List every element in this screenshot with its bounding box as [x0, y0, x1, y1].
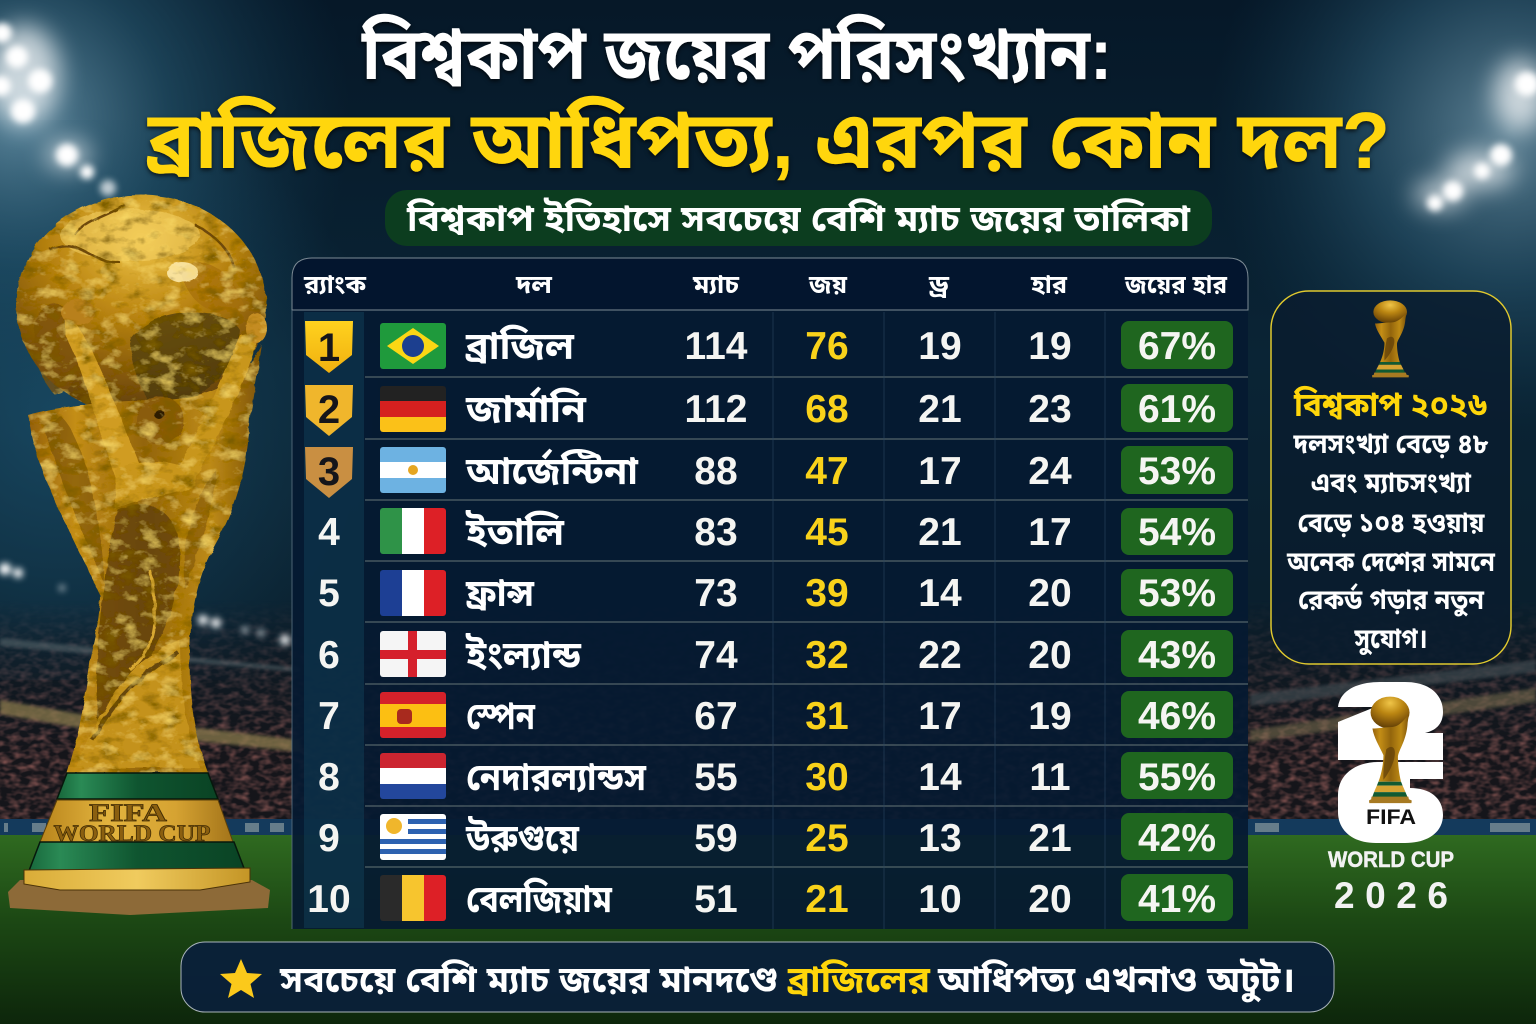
flag: Italy: [380, 508, 446, 554]
row 4 Italy: 45: [805, 511, 849, 554]
row 8 Netherlands: 14: [918, 756, 962, 799]
row 9 Uruguay: 59: [694, 817, 738, 860]
flag: Netherlands: [380, 753, 446, 799]
row 5 France: 73: [694, 572, 738, 615]
row 7 Spain: 67: [694, 695, 738, 738]
row 8 Netherlands: 11: [1029, 756, 1071, 799]
row 6 England: 22: [918, 634, 962, 677]
row 4 Italy: [318, 508, 1233, 555]
FIFA World Cup 2026 logo: 2026: [1334, 875, 1448, 916]
row 9 Uruguay: 25: [805, 817, 849, 860]
rank badge 1: [305, 321, 353, 373]
icon: star: [220, 959, 262, 998]
bottom callout: [181, 942, 1334, 1012]
row 9 Uruguay: 9: [318, 817, 340, 860]
row 8 Netherlands: নেদারল্যান্ডস: [466, 757, 646, 799]
row 7 Spain: 46%: [1138, 695, 1216, 738]
row 9 Uruguay: 42%: [1138, 817, 1216, 860]
table header: জয়: [808, 271, 848, 299]
row 7 Spain: 17: [918, 695, 962, 738]
row 8 Netherlands: [318, 752, 1233, 799]
row 7 Spain: 19: [1028, 695, 1072, 738]
FIFA World Cup 2026 logo: WORLD CUP: [1328, 847, 1454, 872]
row 4 Italy: 83: [694, 511, 738, 554]
side panel: World Cup 2026: বিশ্বকাপ ২০২৬: [1293, 386, 1487, 423]
row 5 France: 39: [805, 572, 849, 615]
bottom callout: সবচেয়ে বেশি ম্যাচ জয়ের মানদণ্ডে: [279, 959, 778, 1000]
flag: Spain: [380, 692, 446, 738]
row 10 Belgium: 21: [805, 878, 849, 921]
icon: logo trophy: [1369, 697, 1412, 803]
row 8 Netherlands: 30: [805, 756, 849, 799]
row 2 Germany: 68: [805, 388, 849, 431]
row 4 Italy: ইতালি: [465, 510, 565, 554]
table header: ম্যাচ: [692, 271, 740, 299]
row 4 Italy: 21: [918, 511, 962, 554]
row 3 Argentina: 24: [1028, 450, 1072, 493]
row 1 Brazil: ব্রাজিল: [465, 324, 575, 368]
table panel: [292, 258, 1248, 929]
table header: [292, 258, 1248, 310]
row 1 Brazil: 19: [918, 325, 962, 368]
row 10 Belgium: 51: [694, 878, 738, 921]
World Cup trophy: [8, 195, 270, 915]
table header: ড্র: [928, 271, 950, 299]
row 3 Argentina: [380, 446, 1233, 494]
row 3 Argentina: 53%: [1138, 450, 1216, 493]
row 5 France: ফ্রান্স: [465, 573, 535, 615]
title: [146, 13, 1390, 185]
row 9 Uruguay: 13: [918, 817, 962, 860]
row 3 Argentina: 47: [805, 450, 849, 493]
rank badge 3: 3: [318, 450, 340, 494]
flag: Argentina: [380, 447, 446, 493]
row 2 Germany: 61%: [1138, 388, 1216, 431]
subtitle pill: বিশ্বকাপ ইতিহাসে সবচেয়ে বেশি ম্যাচ জয়ের তালিকা: [406, 198, 1191, 239]
row 1 Brazil: 67%: [1138, 325, 1216, 368]
row 10 Belgium: 10: [918, 878, 962, 921]
flag: Uruguay: [380, 814, 446, 860]
row 2 Germany: 23: [1028, 388, 1072, 431]
side panel: World Cup 2026: রেকর্ড গড়ার নতুন: [1298, 582, 1485, 617]
row 2 Germany: 21: [918, 388, 962, 431]
row 5 France: 53%: [1138, 572, 1216, 615]
row 1 Brazil: 114: [685, 325, 748, 368]
row 3 Argentina: আর্জেন্টিনা: [465, 449, 639, 493]
figure: [136, 396, 184, 444]
row 5 France: 5: [318, 572, 340, 615]
bottom callout: ব্রাজিলের: [787, 959, 931, 1000]
trophy base engraving: [54, 800, 210, 846]
side panel: World Cup 2026: এবং ম্যাচসংখ্যা: [1311, 467, 1472, 498]
trophy base engraving: FIFA: [89, 800, 167, 827]
row 6 England: ইংল্যান্ড: [465, 633, 582, 677]
row 2 Germany: 112: [685, 388, 747, 431]
row 9 Uruguay: উরুগুয়ে: [465, 816, 580, 860]
row 2 Germany: [380, 384, 1233, 432]
row 4 Italy: 54%: [1138, 511, 1216, 554]
row 1 Brazil: [380, 321, 1233, 369]
row 6 England: 6: [318, 634, 340, 677]
row 8 Netherlands: 55: [694, 756, 738, 799]
row 1 Brazil: 76: [805, 325, 849, 368]
row 5 France: [318, 569, 1233, 616]
row 7 Spain: স্পেন: [466, 696, 536, 738]
row 7 Spain: 31: [805, 695, 849, 738]
table header: র‍্যাংক: [303, 271, 367, 299]
table header: হার: [1030, 271, 1068, 299]
FIFA World Cup 2026 logo: [1328, 682, 1454, 916]
arms: [65, 310, 142, 490]
rank badge 2: [305, 385, 353, 436]
row 6 England: 20: [1028, 634, 1072, 677]
bottom callout: আধিপত্য এখনাও অটুট।: [937, 959, 1295, 1003]
row 5 France: 14: [918, 572, 962, 615]
FIFA World Cup 2026 logo: FIFA: [1366, 806, 1416, 829]
side panel: World Cup 2026: অনেক দেশের সামনে: [1286, 546, 1495, 577]
flag: Germany: [380, 386, 446, 432]
table header: জয়ের হার: [1124, 271, 1228, 299]
row 1 Brazil: 19: [1028, 325, 1072, 368]
row 5 France: 20: [1028, 572, 1072, 615]
row 6 England: [318, 630, 1233, 677]
subtitle pill: [385, 190, 1212, 246]
rank badge 2: 2: [318, 388, 340, 432]
row 3 Argentina: 17: [918, 450, 962, 493]
side panel: World Cup 2026: বেড়ে ১০৪ হওয়ায়: [1298, 507, 1485, 538]
row 2 Germany: জার্মানি: [465, 387, 587, 431]
side panel: World Cup 2026: দলসংখ্যা বেড়ে ৪৮: [1293, 428, 1488, 459]
row 9 Uruguay: 21: [1028, 817, 1072, 860]
row 10 Belgium: 20: [1028, 878, 1072, 921]
side panel: World Cup 2026: [1271, 291, 1511, 664]
row 7 Spain: [318, 691, 1233, 738]
table header: দল: [515, 271, 553, 299]
flag: Belgium: [380, 875, 446, 921]
title: ব্রাজিলের আধিপত্য, এরপর কোন দল?: [146, 94, 1390, 185]
trophy base engraving: WORLD CUP: [54, 821, 210, 846]
row 6 England: 74: [694, 634, 738, 677]
row 10 Belgium: বেলজিয়াম: [466, 877, 613, 921]
row 4 Italy: 4: [318, 511, 340, 554]
row 4 Italy: 17: [1028, 511, 1072, 554]
flag: England: [380, 631, 446, 677]
side panel: World Cup 2026: সুযোগ।: [1354, 623, 1428, 656]
rank badge 1: 1: [318, 326, 340, 370]
row 8 Netherlands: 55%: [1138, 756, 1216, 799]
row 6 England: 43%: [1138, 634, 1216, 677]
icon: small trophy: [1372, 300, 1409, 377]
row 10 Belgium: 10: [307, 878, 351, 921]
row 6 England: 32: [805, 634, 849, 677]
row 9 Uruguay: [318, 813, 1233, 860]
row 8 Netherlands: 8: [318, 756, 340, 799]
globe continents shading: [34, 205, 245, 406]
row 10 Belgium: 41%: [1138, 878, 1216, 921]
row 7 Spain: 7: [318, 695, 340, 738]
title: বিশ্বকাপ জয়ের পরিসংখ্যান:: [361, 13, 1112, 95]
flag: Brazil: [380, 323, 446, 369]
flag: France: [380, 570, 446, 616]
row 3 Argentina: 88: [694, 450, 738, 493]
row 10 Belgium: [307, 874, 1233, 921]
rank badge 3: [305, 447, 353, 498]
